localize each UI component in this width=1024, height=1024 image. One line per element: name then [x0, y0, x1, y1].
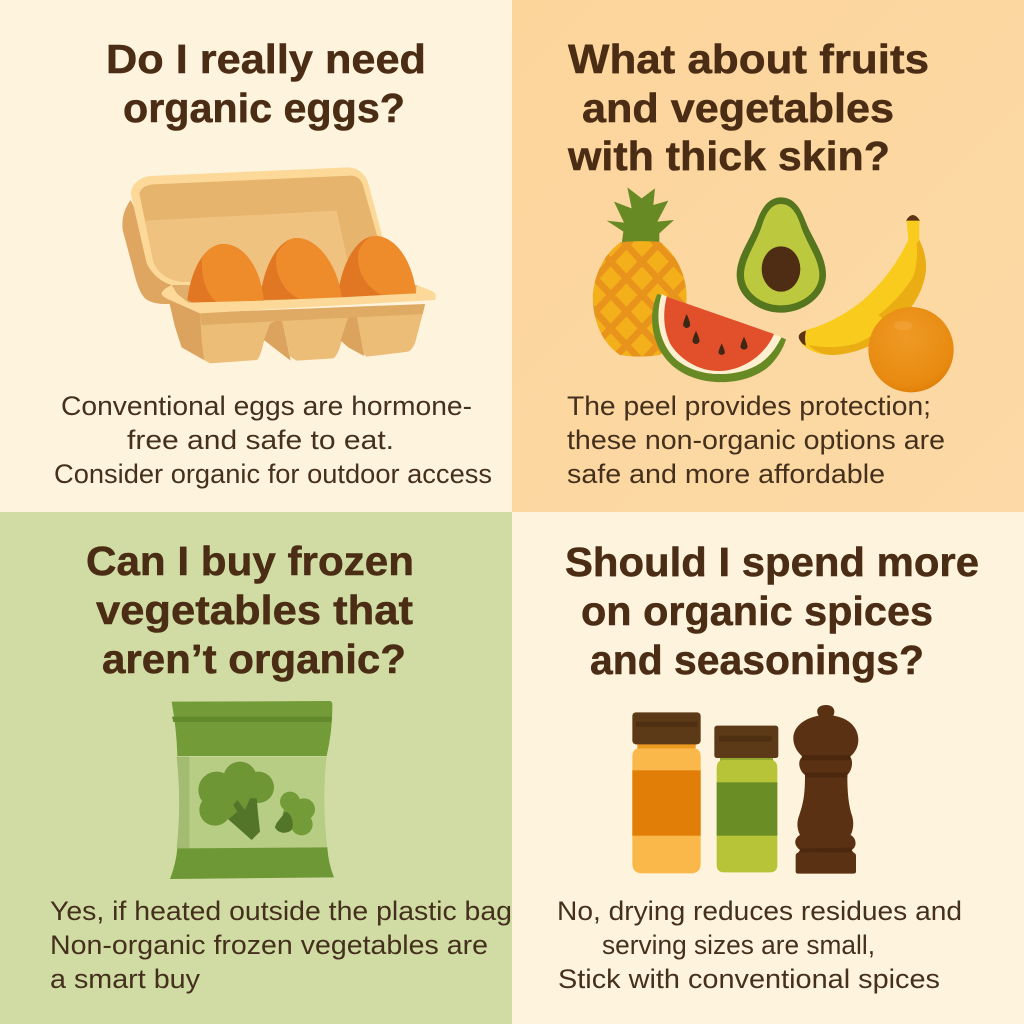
broccoli [198, 762, 274, 840]
body text: frozen: Non-organic frozen vegetables are [50, 930, 488, 960]
body text: spices: serving sizes are small, [602, 930, 875, 960]
orange jar [632, 712, 701, 873]
heading: thick skin: and vegetables [582, 85, 894, 131]
heading: thick skin: with thick skin? [567, 133, 890, 179]
heading: frozen [86, 538, 414, 682]
tray back rim [172, 285, 433, 307]
body text: thick skin: safe and more affordable [567, 459, 885, 489]
eggs [187, 236, 416, 307]
body text: thick skin [567, 391, 945, 489]
panel: thick skin produce [512, 0, 1024, 512]
body text: frozen: a smart buy [50, 964, 201, 994]
heading: eggs [106, 36, 426, 131]
heading: spices [565, 539, 979, 683]
icon: spice jars and pepper mill [632, 705, 858, 874]
body text: eggs: Conventional eggs are hormone- [61, 391, 472, 421]
panel: frozen vegetables [0, 512, 512, 1024]
heading: thick skin: What about fruits [568, 36, 929, 82]
panel: organic eggs [55, 43, 491, 488]
body text: eggs [54, 391, 492, 489]
body text: thick skin: these non-organic options are [567, 425, 945, 455]
body text: eggs: Consider organic for outdoor access [54, 459, 492, 489]
banana [799, 215, 926, 355]
body text: spices [557, 896, 962, 994]
icon: fruit group [587, 136, 954, 454]
heading: frozen: aren’t organic? [102, 636, 406, 682]
heading: spices: and seasonings? [590, 637, 924, 683]
body text: spices: Stick with conventional spices [558, 964, 940, 994]
orange [868, 307, 954, 392]
avocado [737, 197, 826, 313]
body text: frozen: Yes, if heated outside the plastic bag [50, 896, 512, 926]
heading: spices: on organic spices [581, 588, 933, 634]
heading: frozen: Can I buy frozen [86, 538, 414, 584]
body text: frozen [50, 896, 512, 994]
icon: egg carton [122, 167, 436, 363]
heading: spices: Should I spend more [565, 539, 979, 585]
body text: thick skin: The peel provides protection; [567, 391, 931, 421]
tray rim [162, 285, 436, 313]
panel: spices [512, 512, 1024, 1024]
green jar [714, 726, 778, 872]
body text: spices: No, drying reduces residues and [557, 896, 962, 926]
pineapple [592, 188, 687, 357]
watermelon [652, 294, 786, 382]
tray front [168, 298, 425, 363]
heading: eggs: Do I really need [106, 36, 426, 82]
body text: eggs: free and safe to eat. [127, 425, 394, 455]
icon: frozen vegetable bag [170, 701, 334, 879]
heading: eggs: organic eggs? [123, 85, 405, 131]
heading: frozen: vegetables that [96, 587, 413, 633]
pepper mill [793, 705, 858, 874]
heading: thick skin [567, 36, 929, 179]
small broccoli [275, 792, 315, 835]
